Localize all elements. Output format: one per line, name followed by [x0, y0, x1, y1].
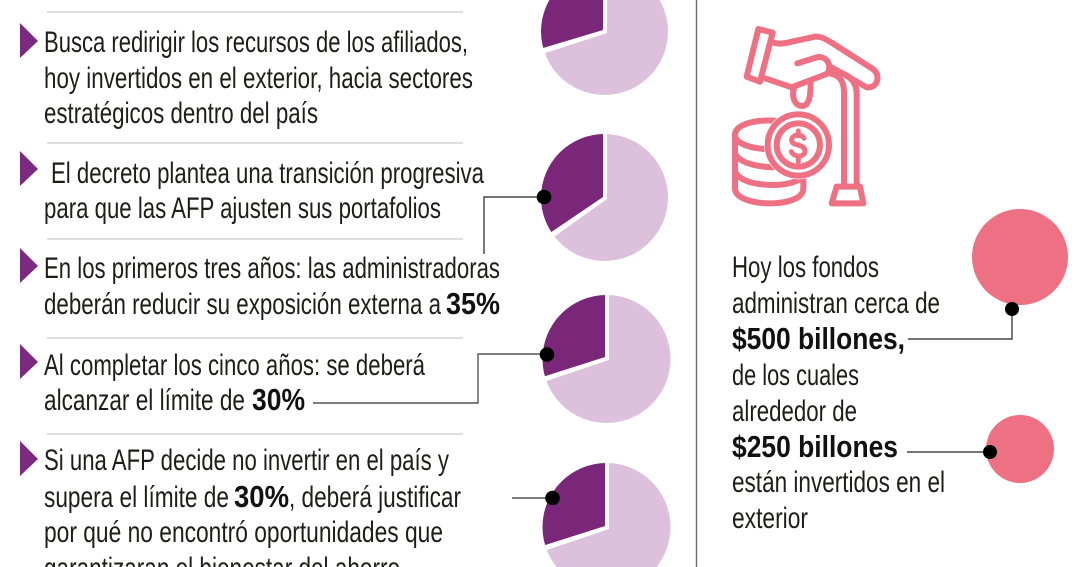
connector: 35% to pie 2 — [484, 190, 551, 254]
panel: funds text: exterior — [732, 502, 808, 535]
point 1: redirect resources: hoy invertidos en el exterior, hacia sectores — [44, 62, 473, 95]
panel: funds text — [732, 251, 945, 535]
point 4: five years: Al completar los cinco años: se deberá — [44, 349, 425, 382]
panel: funds text: $500 billones, — [732, 321, 905, 356]
connector: limit to pie 4 — [512, 491, 560, 505]
panel: funds text: $250 billones — [732, 429, 898, 464]
panel: funds text: Hoy los fondos — [732, 251, 879, 284]
point 3: first three years: deberán reducir su exposición externa a — [44, 288, 441, 321]
point 1: redirect resources: estratégicos dentro del país — [44, 97, 318, 130]
point 5: justification: Si una AFP decide no invertir en el país y — [44, 444, 449, 477]
pie chart 3 — [542, 295, 670, 423]
point 3: first three years — [20, 248, 500, 321]
panel: funds text: de los cuales — [732, 359, 859, 392]
point 4: five years: alcanzar el límite de — [44, 384, 245, 417]
point 2: progressive transition: para que las AFP ajusten sus portafolios — [44, 192, 441, 225]
point 1: redirect resources — [20, 23, 473, 130]
point 4: five years: 30% — [252, 382, 305, 417]
panel: funds text: están invertidos en el — [732, 466, 945, 499]
point 5: justification: supera el límite de — [44, 481, 229, 514]
point 5: justification: , deberá justificar — [289, 481, 461, 514]
bubble: 250 billones — [907, 415, 1054, 483]
point 5: justification — [20, 441, 461, 567]
point 5: justification: por qué no encontró oportunidades que — [44, 516, 443, 549]
point 4: five years — [20, 344, 425, 417]
pie chart 4 — [542, 463, 670, 567]
icon: hand dropping coin with cane — [735, 29, 878, 203]
panel: funds text: administran cerca de — [732, 287, 940, 320]
point 3: first three years: En los primeros tres años: las administradoras — [44, 252, 500, 285]
point 2: progressive transition — [20, 151, 484, 225]
pie chart 1 — [541, 0, 668, 95]
point 5: justification: 30% — [234, 479, 289, 514]
panel: decree points — [20, 23, 500, 567]
point 1: redirect resources: Busca redirigir los recursos de los afiliados, — [44, 26, 468, 59]
point 3: first three years: 35% — [446, 286, 500, 321]
pie chart 2 — [541, 134, 668, 261]
panel: funds text: alrededor de — [732, 395, 857, 428]
connector: 30% to pie 3 — [313, 347, 554, 403]
bubble: 500 billones — [908, 209, 1068, 339]
point 2: progressive transition: El decreto plantea una transición progresiva — [51, 157, 484, 190]
